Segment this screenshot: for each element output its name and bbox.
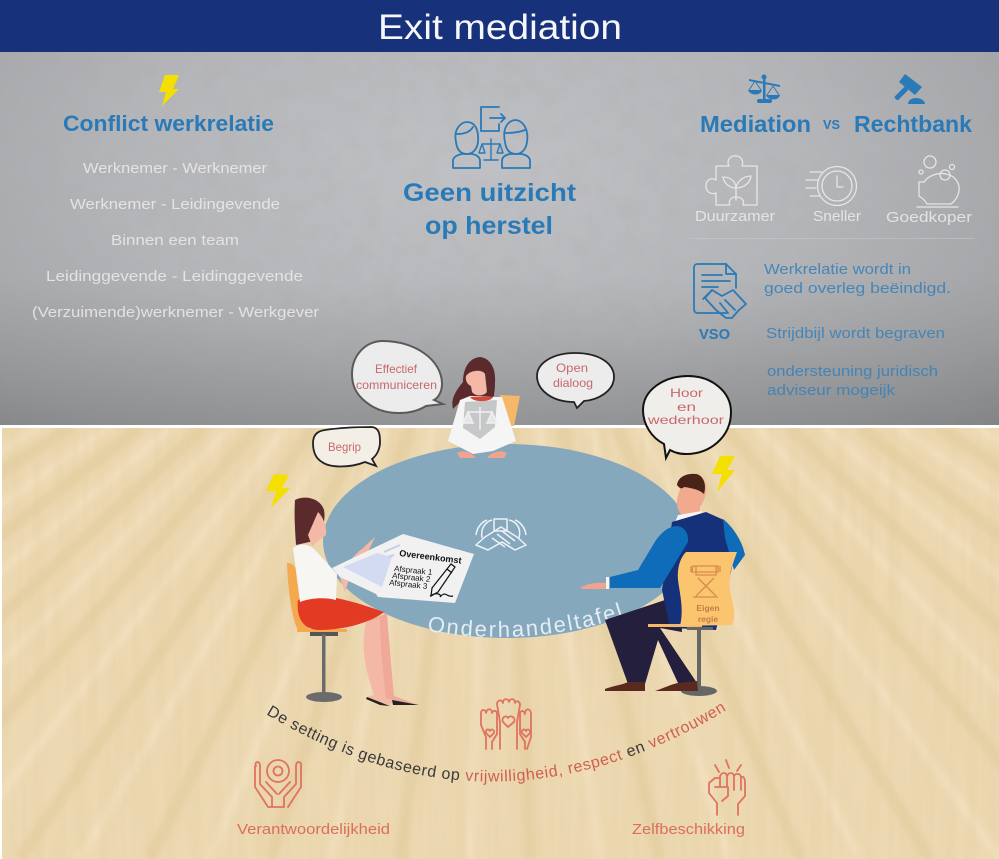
figure: mediator <box>448 357 516 458</box>
background wall <box>0 52 999 426</box>
speech bubble: open dialoog: dialoog <box>553 376 593 390</box>
icon: fast clock <box>806 166 856 206</box>
document: overeenkomst: Overeenkomst <box>399 548 462 566</box>
speech bubble: effectief communiceren <box>352 341 443 413</box>
panel: vso <box>694 261 951 399</box>
icon: puzzle with plant <box>706 156 757 205</box>
heading: rechtbank: Rechtbank <box>854 111 972 137</box>
text block: juridisch adviseur: ondersteuning juridisch <box>767 363 938 380</box>
text block: conflict parties: (Verzuimende)werknemer - Werkgever <box>32 304 319 321</box>
document: overeenkomst: Afspraak 3 <box>389 578 428 591</box>
figure: woman left <box>287 498 419 706</box>
speech bubble: hoor en wederhoor: en <box>677 400 696 414</box>
speech bubble: begrip: Begrip <box>328 440 361 454</box>
heading: geen uitzicht op herstel: op herstel <box>425 212 553 240</box>
text block: strijdbijl: Strijdbijl wordt begraven <box>766 325 945 342</box>
heading: conflict werkrelatie: Conflict werkrelatie <box>63 111 274 136</box>
panel: conflict werkrelatie <box>32 75 319 321</box>
speech bubble: effectief communiceren: Effectief <box>375 362 418 376</box>
table <box>323 444 691 638</box>
icon: two people, exit door and scales <box>453 107 530 168</box>
text block: juridisch adviseur: adviseur mogeijk <box>767 382 896 399</box>
text block: conflict parties <box>32 160 319 321</box>
icon: raised fist <box>709 760 745 815</box>
speech bubble: hoor en wederhoor: Hoor <box>670 386 703 400</box>
panel: mediation vs rechtbank <box>695 74 972 226</box>
speech bubble: effectief communiceren: communiceren <box>356 378 437 392</box>
mediator chair <box>500 395 520 426</box>
panel: geen uitzicht op herstel <box>403 107 583 240</box>
title: Exit mediation <box>378 8 622 47</box>
icon: director chair <box>691 566 720 597</box>
label: duurzamer: Duurzamer <box>695 208 775 225</box>
text block: werkrelatie: goed overleg beëindigd. <box>764 280 951 297</box>
icon: lightning bolt left <box>266 474 290 508</box>
label: goedkoper: Goedkoper <box>886 209 972 226</box>
speech bubble: begrip <box>313 427 380 466</box>
label: verantwoordelijkheid: Verantwoordelijkheid <box>237 821 390 838</box>
icon: contract with handshake <box>694 264 746 318</box>
document: overeenkomst <box>332 534 474 603</box>
text block: conflict parties: Werknemer - Werknemer <box>83 160 267 177</box>
wooden floor <box>0 425 999 859</box>
chair back: eigen regie: Eigen <box>696 603 720 613</box>
icon: lightning bolt right <box>712 456 735 492</box>
icon: gavel <box>894 74 925 104</box>
speech bubble: hoor en wederhoor <box>643 376 731 458</box>
icon: lightning bolt <box>159 75 179 106</box>
speech bubble: open dialoog: Open <box>556 361 588 375</box>
document: overeenkomst: Afspraak 1 <box>394 564 433 577</box>
header bar <box>0 0 999 52</box>
icon: hands with hearts <box>481 699 531 749</box>
label: vso: VSO <box>699 326 730 343</box>
speech bubble: hoor en wederhoor: wederhoor <box>647 413 724 427</box>
curved caption: setting: De setting is gebaseerd op vrijwilligheid, respect en vertrouwen <box>267 704 726 785</box>
text block: werkrelatie: Werkrelatie wordt in <box>764 261 911 278</box>
speech bubble: open dialoog <box>537 353 614 408</box>
text block: conflict parties: Leidinggevende - Leidinggevende <box>46 268 303 285</box>
text block: conflict parties: Binnen een team <box>111 232 239 249</box>
label: sneller: Sneller <box>813 208 861 225</box>
icon: pen signature <box>430 564 455 597</box>
label: zelfbeschikking: Zelfbeschikking <box>632 821 745 838</box>
chair back: eigen regie <box>678 552 737 626</box>
text block: conflict parties: Werknemer - Leidingevende <box>70 196 280 213</box>
heading: mediation: Mediation <box>700 111 811 137</box>
heading: geen uitzicht op herstel: Geen uitzicht <box>403 179 577 207</box>
figure: man right <box>580 474 745 696</box>
label: onderhandeltafel: Onderhandeltafel <box>429 602 622 637</box>
icon: piggy bank <box>917 156 959 207</box>
icon: joined hands on table <box>476 519 526 550</box>
chair back: eigen regie: regie <box>698 614 718 624</box>
icon: responsibility hands <box>255 760 301 807</box>
document: overeenkomst: Afspraak 2 <box>392 571 431 584</box>
label: vs: VS <box>823 117 840 132</box>
icon: scales <box>748 74 780 103</box>
